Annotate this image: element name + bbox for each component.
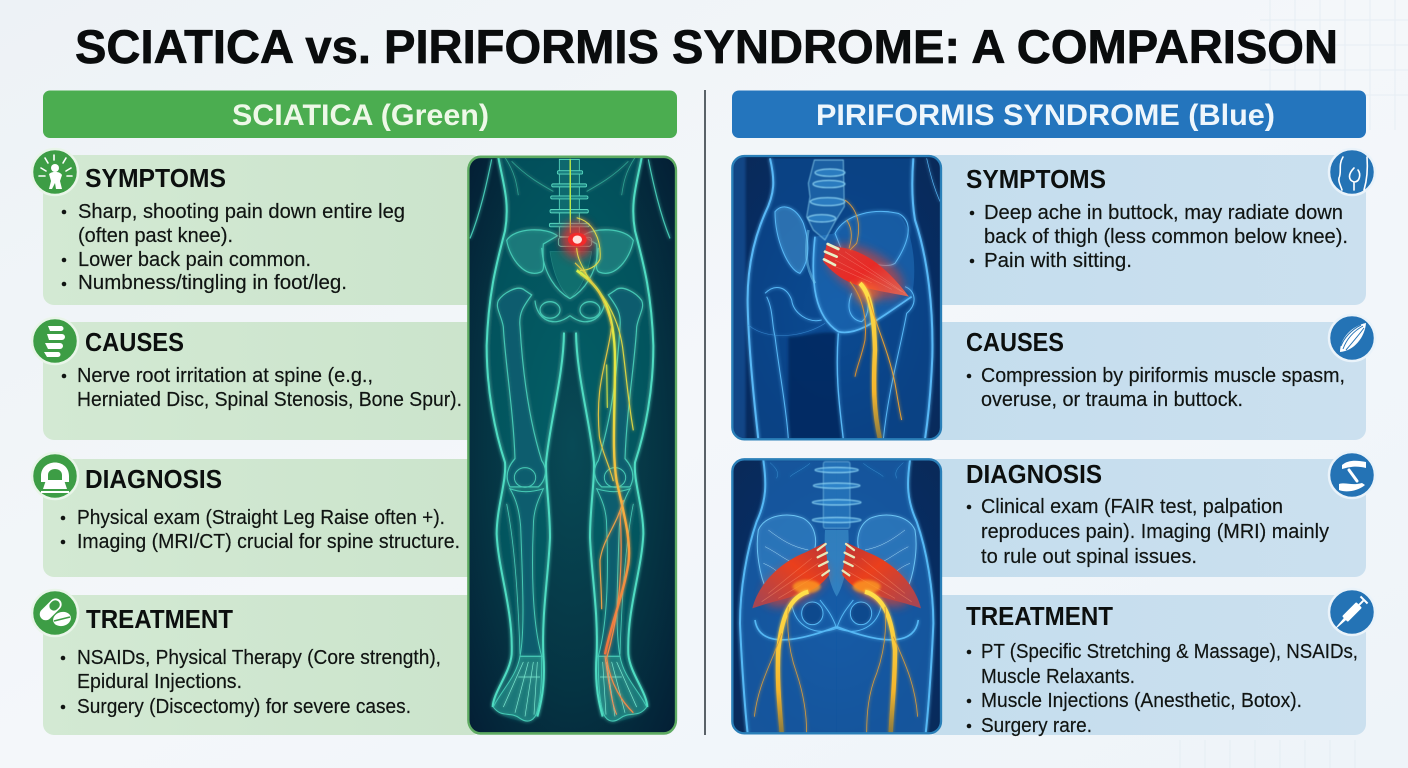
heading: diagnosis: DIAGNOSIS <box>966 461 1102 489</box>
panel: piriformis treatment <box>925 595 1366 737</box>
heading: diagnosis: DIAGNOSIS <box>85 466 222 494</box>
text: sciatica symptoms: (often past knee). <box>78 224 233 247</box>
heading: causes: CAUSES <box>966 329 1064 357</box>
text: sciatica causes <box>62 364 462 411</box>
heading: symptoms: SYMPTOMS <box>85 165 226 193</box>
text: sciatica treatment <box>61 646 441 718</box>
text: piriformis symptoms: Pain with sitting. <box>984 249 1132 272</box>
column header: sciatica <box>43 90 677 138</box>
panel: sciatica diagnosis <box>43 459 483 577</box>
column header: piriformis syndrome: PIRIFORMIS SYNDROME (Blue) <box>816 99 1275 132</box>
text: sciatica diagnosis: Imaging (MRI/CT) crucial for spine structure. <box>77 530 460 553</box>
text: piriformis diagnosis: reproduces pain). Imaging (MRI) mainly <box>981 520 1330 543</box>
icon: hips outline <box>1329 149 1375 195</box>
title: SCIATICA vs. PIRIFORMIS SYNDROME: A COMPARISON <box>75 21 1338 74</box>
text: piriformis treatment: PT (Specific Stretching & Massage), NSAIDs, <box>981 640 1358 663</box>
text: sciatica symptoms: Numbness/tingling in foot/leg. <box>78 271 347 294</box>
column header: sciatica: SCIATICA (Green) <box>232 99 489 132</box>
text: piriformis symptoms <box>970 201 1348 272</box>
text: piriformis treatment <box>967 640 1358 737</box>
text: piriformis treatment: Muscle Injections (Anesthetic, Botox). <box>981 689 1302 712</box>
panel: piriformis diagnosis <box>925 459 1366 577</box>
illustration: bilateral piriformis muscles rear view <box>732 459 941 733</box>
text: sciatica treatment: Surgery (Discectomy) for severe cases. <box>77 695 411 718</box>
icon: vertebrae <box>32 318 78 364</box>
panel: sciatica symptoms <box>43 155 483 305</box>
text: piriformis causes: overuse, or trauma in buttock. <box>981 388 1243 411</box>
panel: sciatica treatment <box>43 595 483 735</box>
heading: causes: CAUSES <box>85 329 184 357</box>
text: sciatica diagnosis <box>61 506 460 553</box>
icon: MRI scanner <box>32 453 78 499</box>
icon: syringe <box>1329 589 1375 635</box>
panel: piriformis symptoms <box>925 155 1366 305</box>
text: sciatica symptoms: Lower back pain common. <box>78 248 311 271</box>
text: sciatica diagnosis: Physical exam (Straight Leg Raise often +). <box>77 506 445 529</box>
text: sciatica treatment: Epidural Injections. <box>77 670 242 693</box>
panel: sciatica causes <box>43 322 483 440</box>
icon: pain in lower back <box>32 149 78 195</box>
text: piriformis symptoms: back of thigh (less common below knee). <box>984 225 1348 248</box>
text: piriformis causes <box>967 364 1345 411</box>
illustration: piriformis muscle side view <box>732 156 941 439</box>
text: sciatica symptoms <box>62 200 405 294</box>
text: sciatica treatment: NSAIDs, Physical Therapy (Core strength), <box>77 646 441 669</box>
icon: examining hands <box>1329 452 1375 498</box>
heading: treatment: TREATMENT <box>966 603 1113 631</box>
heading: symptoms: SYMPTOMS <box>966 166 1106 194</box>
text: piriformis symptoms: Deep ache in buttock, may radiate down <box>984 201 1343 224</box>
text: piriformis treatment: Muscle Relaxants. <box>981 665 1135 688</box>
text: sciatica causes: Herniated Disc, Spinal Stenosis, Bone Spur). <box>77 388 462 411</box>
text: piriformis diagnosis <box>967 495 1330 568</box>
text: piriformis diagnosis: to rule out spinal issues. <box>981 545 1197 568</box>
text: piriformis treatment: Surgery rare. <box>981 714 1092 737</box>
text: piriformis diagnosis: Clinical exam (FAIR test, palpation <box>981 495 1283 518</box>
icon: muscle <box>1329 315 1375 361</box>
text: piriformis causes: Compression by piriformis muscle spasm, <box>981 364 1345 387</box>
illustration: full-leg sciatic nerve anatomy <box>468 157 676 733</box>
column header: piriformis syndrome <box>732 90 1366 138</box>
heading: treatment: TREATMENT <box>86 606 233 634</box>
text: sciatica causes: Nerve root irritation at spine (e.g., <box>77 364 373 387</box>
icon: pills <box>32 590 78 636</box>
panel: piriformis causes <box>925 322 1366 440</box>
text: sciatica symptoms: Sharp, shooting pain down entire leg <box>78 200 405 223</box>
